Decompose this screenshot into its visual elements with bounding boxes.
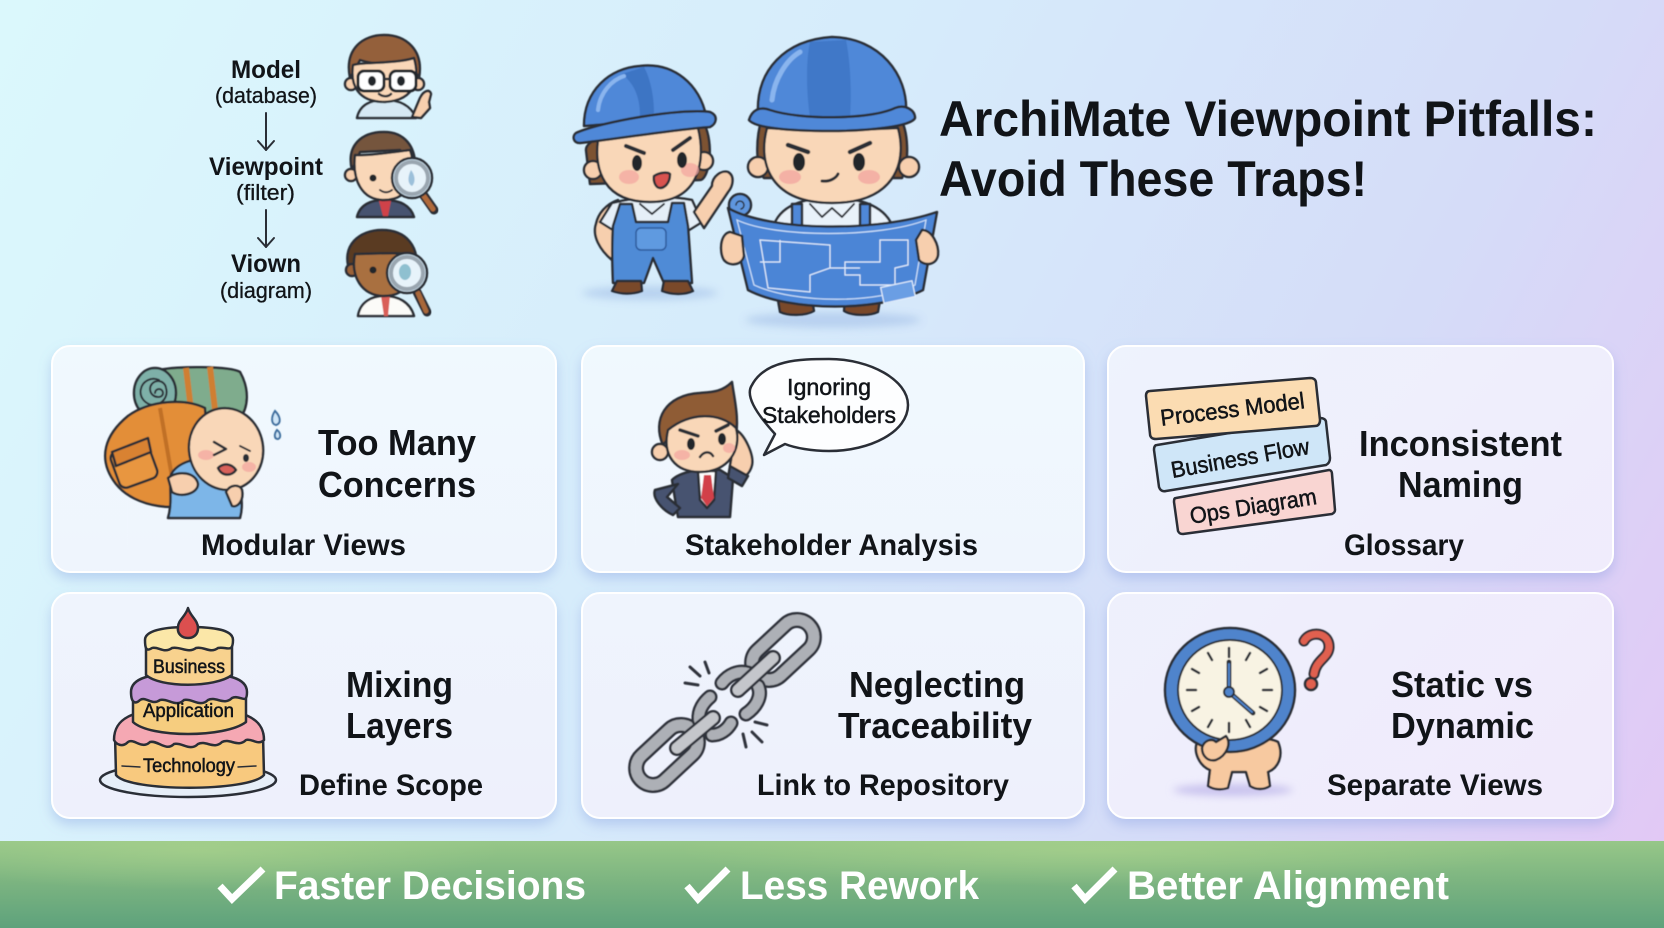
icon: broken chain <box>629 613 821 792</box>
icon: layered cake: Technology <box>143 756 235 777</box>
title <box>939 91 1597 207</box>
solution: Glossary <box>1344 529 1464 562</box>
helmet: left <box>574 66 716 143</box>
title: Avoid These Traps! <box>939 151 1367 207</box>
icon: person with glasses <box>345 35 431 118</box>
heading <box>318 422 476 505</box>
solution: Separate Views <box>1327 769 1543 802</box>
arrow: viewpoint to view <box>258 210 274 247</box>
heading: Inconsistent <box>1359 423 1562 464</box>
heading <box>1391 664 1534 746</box>
benefit: faster decisions: Faster Decisions <box>274 864 586 908</box>
flow diagram: model, viewpoint, view <box>209 35 434 316</box>
worker: left with raised hand <box>574 66 733 300</box>
benefit: less rework: Less Rework <box>740 864 980 908</box>
panel: too many concerns <box>52 346 556 572</box>
panel: neglecting traceability <box>582 593 1084 818</box>
benefit: better alignment: Better Alignment <box>1127 864 1449 908</box>
worker: right with blueprint <box>721 37 938 328</box>
panel: mixing layers <box>52 593 556 818</box>
illustration: two workers with blueprint <box>574 37 938 328</box>
label: Viewpoint: (filter) <box>236 180 295 205</box>
arrow: model to viewpoint <box>258 113 274 150</box>
speech bubble: Stakeholders <box>762 402 896 428</box>
icon: overloaded backpacker <box>105 367 280 518</box>
heading: Neglecting <box>849 664 1025 705</box>
speech bubble: Ignoring <box>787 374 871 400</box>
label: Model: Model <box>231 56 301 84</box>
heading <box>346 664 453 746</box>
icon: confused clock <box>1165 628 1329 796</box>
panel: static vs dynamic <box>1108 593 1613 818</box>
helmet: right <box>749 37 915 131</box>
label: View: (diagram) <box>220 278 312 303</box>
icon: stacked name tags: Business Flow <box>1169 433 1312 483</box>
label: Viewpoint: Viewpoint <box>209 153 324 181</box>
heading: Layers <box>346 705 453 746</box>
heading: Static vs <box>1391 664 1533 705</box>
icon: stacked name tags <box>1146 378 1335 534</box>
heading: Naming <box>1398 464 1523 505</box>
label: Viewpoint <box>209 153 324 205</box>
solution: Stakeholder Analysis <box>685 529 978 562</box>
icon: stacked name tags: Ops Diagram <box>1188 483 1318 529</box>
solution: Link to Repository <box>757 769 1009 802</box>
heading <box>1359 423 1562 505</box>
solution: Modular Views <box>201 529 406 562</box>
icon: layered cake: Application <box>143 701 234 722</box>
icon: stacked name tags: Process Model <box>1159 387 1306 431</box>
label: Model: (database) <box>215 83 317 108</box>
icon: layered cake: Business <box>153 657 225 678</box>
icon: person with magnifier <box>345 132 434 217</box>
heading: Mixing <box>346 664 453 705</box>
footer band <box>0 841 1664 928</box>
icon: frustrated person <box>652 382 752 517</box>
heading: Too Many <box>318 422 476 463</box>
heading: Traceability <box>838 705 1032 746</box>
heading: Concerns <box>318 464 476 505</box>
heading: Dynamic <box>1391 705 1534 746</box>
title: ArchiMate Viewpoint Pitfalls: <box>939 91 1597 147</box>
solution: Define Scope <box>299 769 483 802</box>
icon: dark-skinned person with magnifier <box>346 230 427 316</box>
label: View <box>220 250 312 303</box>
speech bubble <box>750 359 908 455</box>
label: View: Viown <box>231 250 301 278</box>
heading <box>838 664 1032 746</box>
hands <box>721 230 938 264</box>
label: Model <box>215 56 317 108</box>
blueprint <box>728 194 937 306</box>
panel: inconsistent naming <box>1108 346 1613 572</box>
icon: layered cake <box>100 608 276 797</box>
panel: ignoring stakeholders <box>582 346 1084 572</box>
